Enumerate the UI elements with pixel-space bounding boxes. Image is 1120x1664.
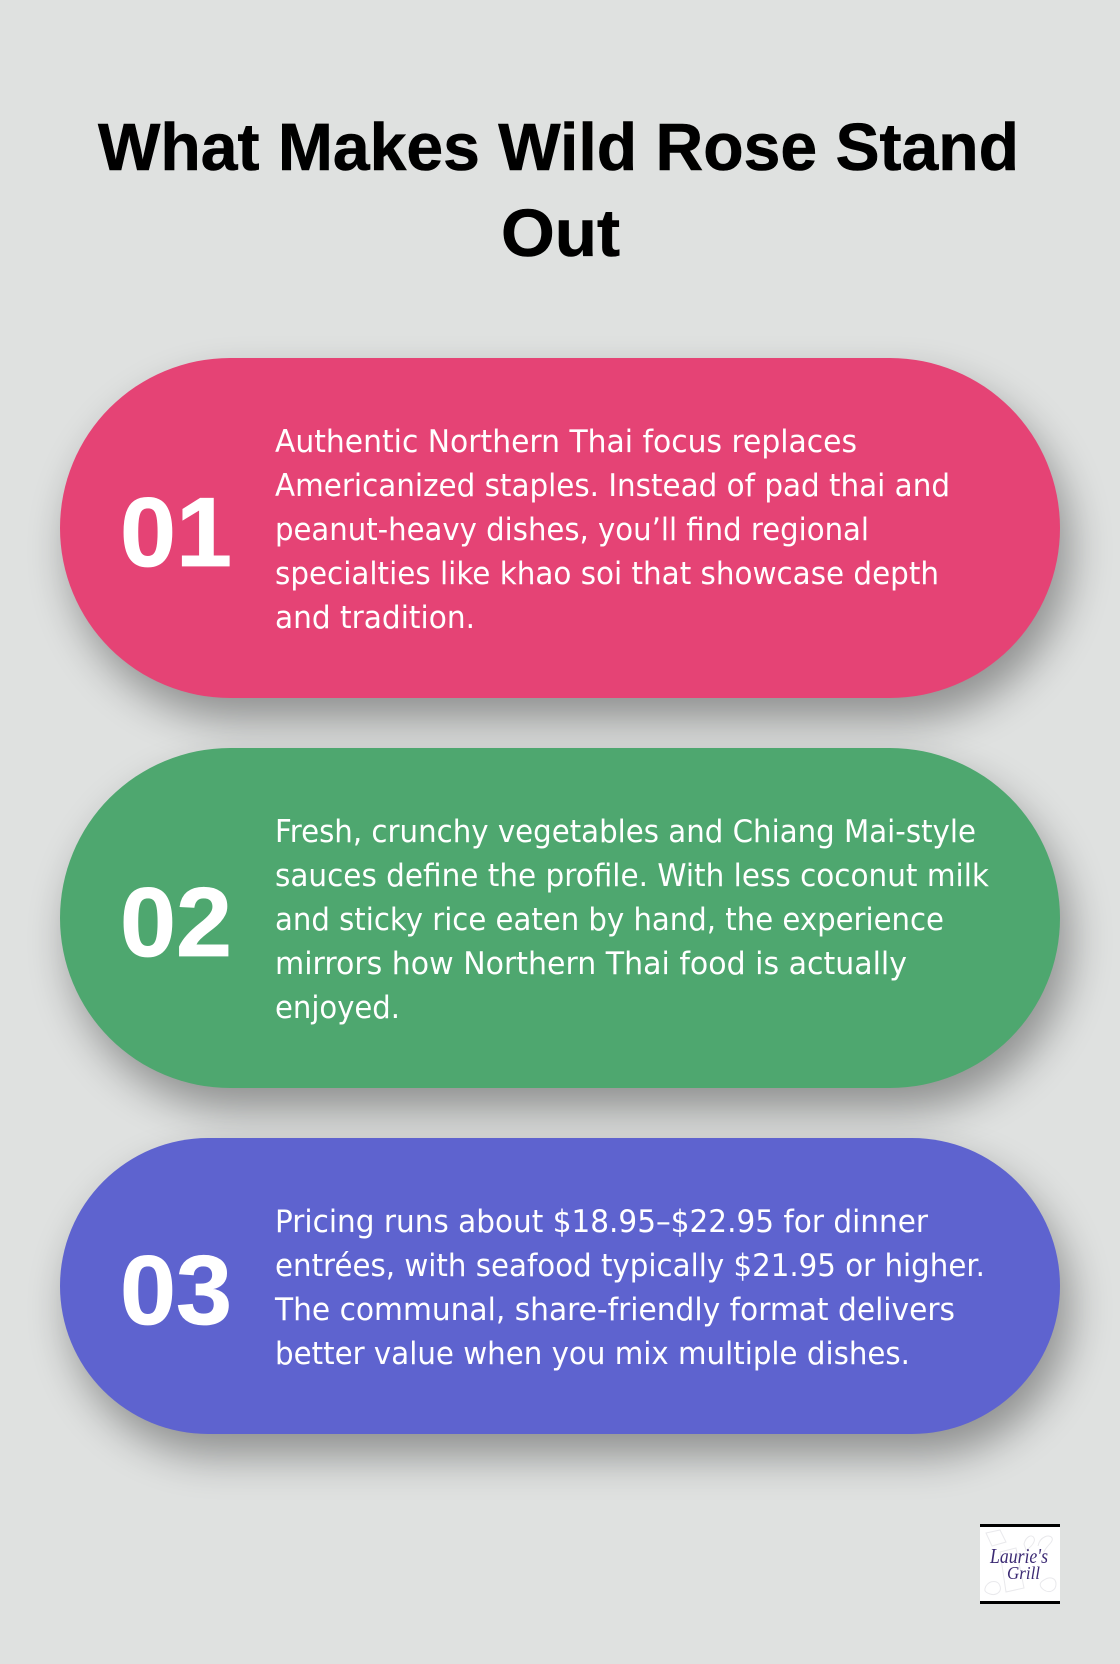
text block 01: and tradition.	[275, 600, 475, 636]
panel: point 03	[60, 1138, 1060, 1434]
number 01: 01	[120, 477, 232, 587]
title: What Makes Wild Rose Stand	[98, 110, 1019, 185]
text block 02: and sticky rice eaten by hand, the experience	[275, 902, 944, 938]
number 02: 02	[120, 867, 232, 977]
green pill background	[60, 748, 1060, 1088]
text block 01: Authentic Northern Thai focus replaces	[275, 424, 857, 460]
pink pill background	[60, 358, 1060, 698]
text block 01: Americanized staples. Instead of pad thai and	[275, 468, 950, 504]
panel: point 01	[60, 358, 1060, 698]
logo: Laurie's Grill	[980, 1524, 1060, 1604]
text block 02: mirrors how Northern Thai food is actually	[275, 946, 907, 982]
text block 03: entrées, with seafood typically $21.95 or higher.	[275, 1248, 985, 1284]
logo: Laurie's Grill: Laurie's	[989, 1544, 1048, 1568]
number 03: 03	[120, 1235, 232, 1345]
logo: Laurie's Grill: Grill	[1007, 1563, 1040, 1583]
text block 02: sauces define the profile. With less coconut milk	[275, 858, 989, 894]
text block 03: The communal, share-friendly format delivers	[274, 1292, 955, 1328]
text block 02	[275, 814, 989, 1026]
text block 02: Fresh, crunchy vegetables and Chiang Mai-style	[275, 814, 976, 850]
text block 03: better value when you mix multiple dishes.	[275, 1336, 910, 1372]
title: Out	[501, 196, 620, 271]
text block 02: enjoyed.	[275, 990, 400, 1026]
text block 03	[274, 1204, 985, 1372]
title	[98, 110, 1019, 271]
text block 01	[275, 424, 950, 636]
text block 01: peanut-heavy dishes, you’ll find regional	[275, 512, 869, 548]
text block 03: Pricing runs about $18.95–$22.95 for dinner	[275, 1204, 928, 1240]
text block 01: specialties like khao soi that showcase depth	[275, 556, 939, 592]
blue pill background	[60, 1138, 1060, 1434]
panel: point 02	[60, 748, 1060, 1088]
